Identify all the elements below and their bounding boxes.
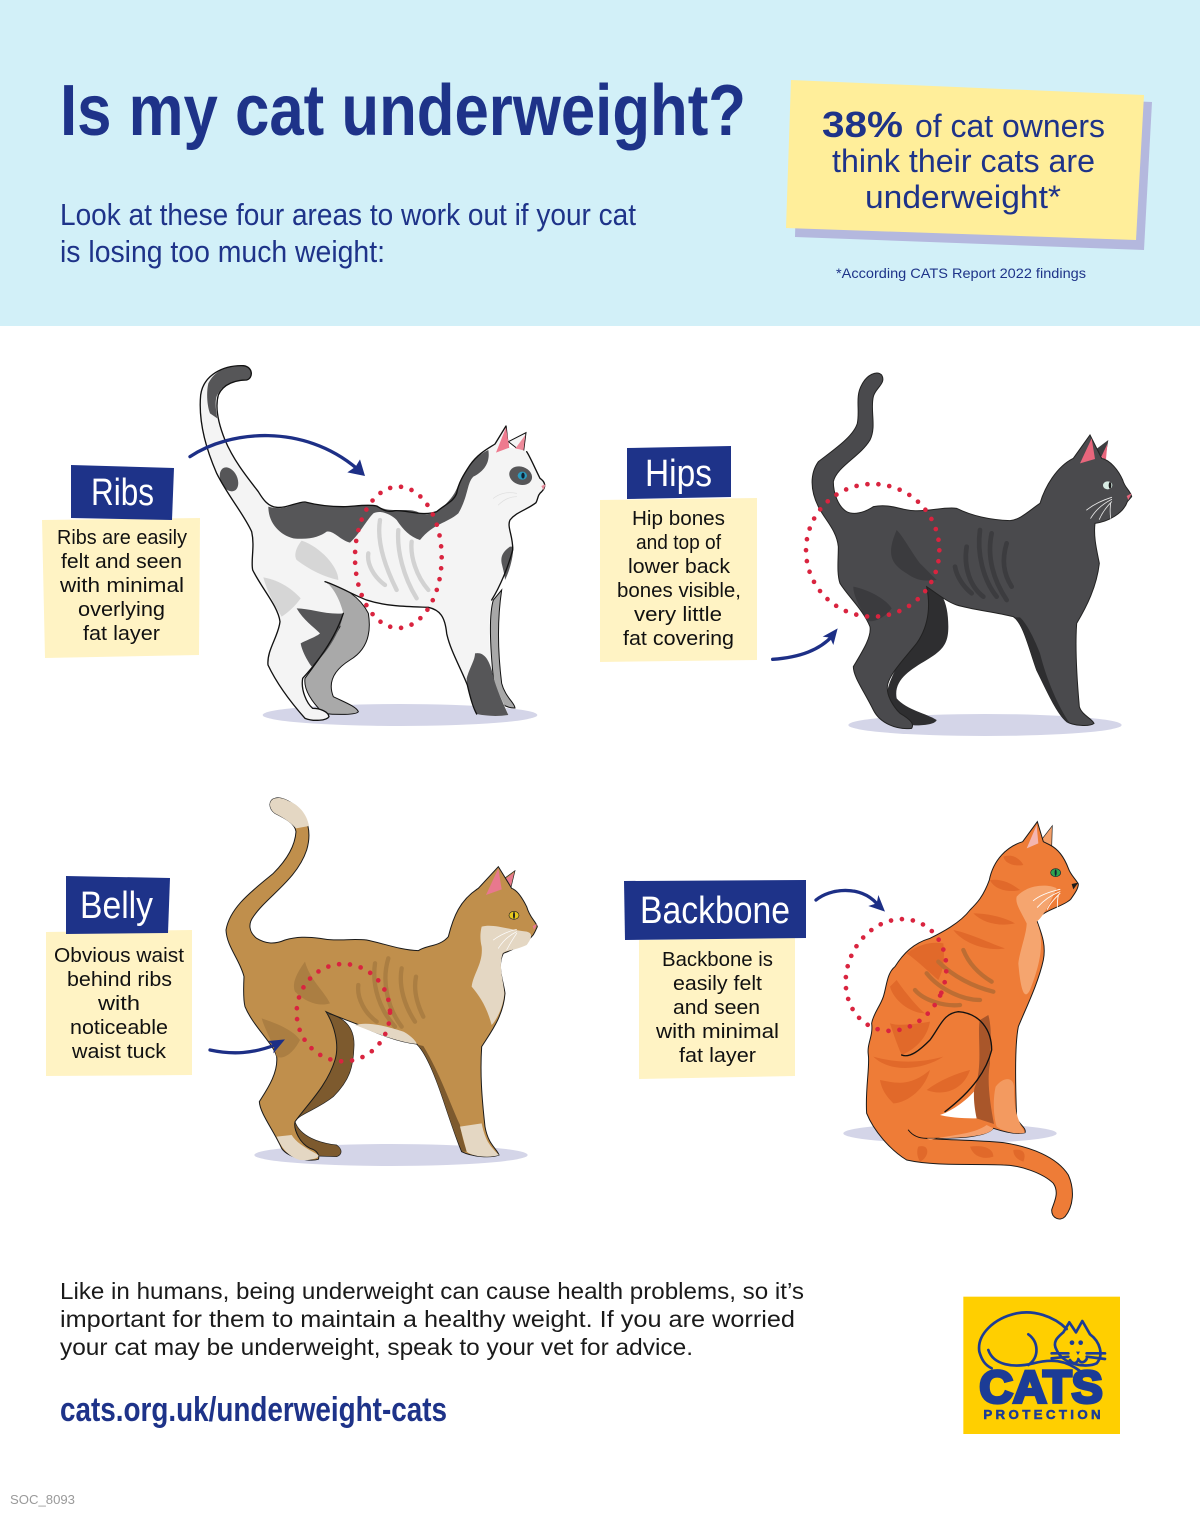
arrow: hips [773, 628, 838, 659]
text box: ribs description [42, 518, 200, 658]
text box: belly description: noticeable [70, 1017, 168, 1039]
dotted circle: hips area [806, 484, 939, 617]
text box: hips description: bones visible, [617, 580, 741, 602]
text box: hips description: Hip bones [632, 508, 725, 530]
panel: ribs [42, 366, 546, 726]
text box: ribs description: with minimal [59, 575, 184, 597]
text box: backbone description: easily felt [673, 973, 762, 995]
text box: backbone description: and seen [673, 997, 760, 1019]
callout: 38% of cat owners: think their cats are [832, 143, 1095, 179]
heading: hips: Hips [645, 453, 712, 495]
callout: 38% of cat owners: of cat owners [915, 108, 1105, 144]
cat illustration: orange tabby cat [843, 822, 1078, 1219]
text box: ribs description: Ribs are easily [57, 527, 187, 549]
text box: backbone description [639, 938, 795, 1079]
title: Is my cat underweight? [60, 71, 746, 151]
website link: cats.org.uk/underweight-cats [60, 1391, 447, 1429]
text box: belly description: Obvious waist [54, 945, 184, 967]
text box: hips description: and top of [636, 532, 721, 554]
heading: ribs: Ribs [91, 472, 154, 514]
footnote: *According CATS Report 2022 findings [836, 265, 1086, 281]
callout: 38% of cat owners: underweight* [865, 179, 1061, 215]
panel: header [0, 0, 1200, 326]
heading: ribs [71, 465, 174, 520]
heading: hips [627, 446, 731, 499]
cat illustration: black and white cat [200, 366, 546, 726]
dotted circle: backbone area [828, 902, 964, 1048]
subtitle: Look at these four areas to work out if your cat [60, 197, 636, 232]
callout: 38% of cat owners [786, 80, 1152, 250]
footer paragraph: Like in humans, being underweight can cause health problems, so it’s [60, 1278, 804, 1304]
heading: backbone: Backbone [640, 890, 790, 932]
footer paragraph [60, 1278, 804, 1360]
arrow: belly [210, 1039, 285, 1053]
panel: backbone [624, 822, 1078, 1219]
text box: belly description: behind ribs [67, 969, 172, 991]
arrow: ribs [190, 436, 365, 476]
cat illustration: black cat [812, 373, 1132, 736]
subtitle: is losing too much weight: [60, 234, 385, 269]
text box: ribs description: fat layer [83, 623, 160, 645]
text box: ribs description: overlying [78, 599, 165, 621]
text box: ribs description: felt and seen [61, 551, 182, 573]
text box: backbone description: fat layer [679, 1045, 756, 1067]
panel: belly [46, 798, 537, 1166]
text box: hips description [600, 498, 757, 662]
footer paragraph: your cat may be underweight, speak to your vet for advice. [60, 1334, 693, 1360]
text box: hips description: very little [634, 604, 722, 626]
text box: backbone description: Backbone is [662, 949, 773, 971]
logo: Cats Protection [963, 1297, 1120, 1434]
text box: hips description: fat covering [623, 628, 734, 650]
dotted circle: belly area [297, 964, 390, 1061]
code: reference number: SOC_8093 [10, 1492, 75, 1507]
heading: backbone [624, 880, 806, 940]
arrow: backbone [816, 890, 885, 912]
callout: 38% of cat owners: 38% [822, 104, 903, 145]
footer paragraph: important for them to maintain a healthy weight. If you are worried [60, 1306, 795, 1332]
text box: belly description: with [97, 993, 140, 1015]
subtitle [60, 197, 636, 269]
logo: Cats Protection: CATS [979, 1362, 1103, 1413]
heading: belly: Belly [80, 885, 153, 927]
logo: Cats Protection: PROTECTION [983, 1407, 1101, 1422]
text box: backbone description: with minimal [655, 1021, 779, 1043]
heading: belly [66, 876, 170, 934]
text box: belly description [46, 930, 192, 1076]
cat illustration: tan and cream cat [226, 798, 537, 1166]
dotted circle: ribs area [355, 487, 442, 628]
panel: hips [600, 373, 1132, 736]
text box: hips description: lower back [628, 556, 731, 578]
text box: belly description: waist tuck [71, 1041, 167, 1063]
